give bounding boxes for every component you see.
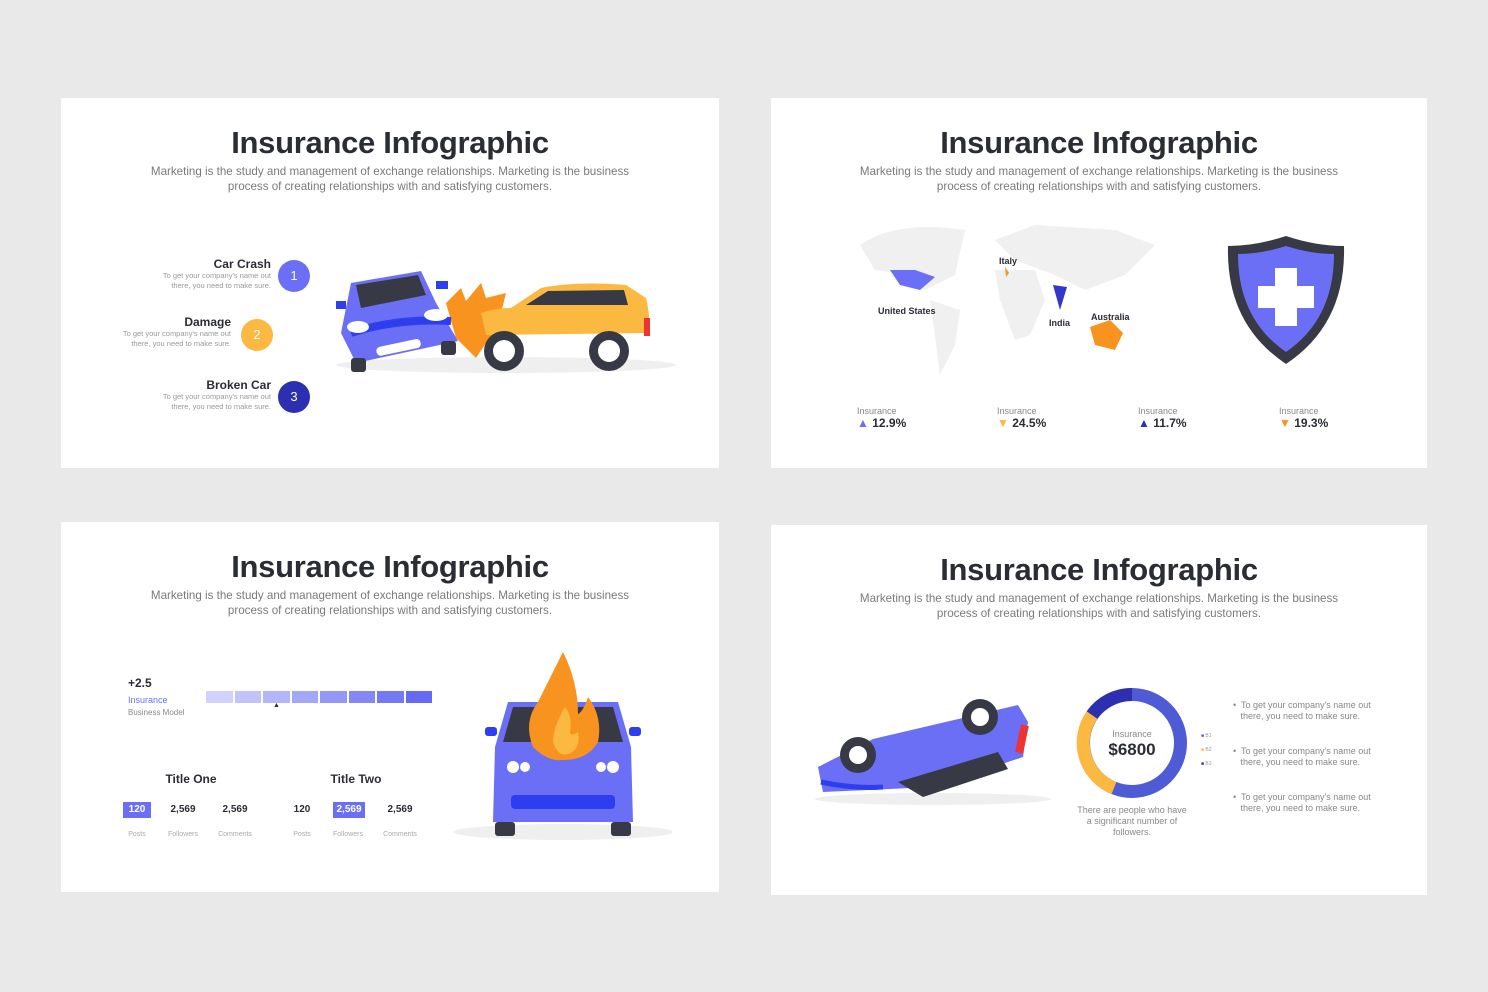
legend: ■ B2 bbox=[1201, 747, 1212, 753]
subtitle: process of creating relationships with and satisfying customers. bbox=[228, 180, 552, 193]
panel: world map: ▼ 24.5% bbox=[997, 416, 1046, 430]
subtitle: Marketing is the study and management of exchange relationships. Marketing is the business bbox=[860, 165, 1338, 178]
subtitle bbox=[860, 165, 1338, 193]
subtitle: process of creating relationships with and satisfying customers. bbox=[228, 604, 552, 617]
gradient bar: ▲ bbox=[273, 702, 280, 709]
item: car crash: To get your company's name out bbox=[163, 271, 271, 280]
legend bbox=[1201, 733, 1212, 767]
bullet list: • To get your company's name out bbox=[1233, 700, 1371, 710]
table: title one: Posts bbox=[128, 831, 146, 838]
table: title two: Followers bbox=[333, 831, 363, 838]
panel: world map: ▼ 19.3% bbox=[1279, 416, 1328, 430]
panel: world map: Australia bbox=[1091, 312, 1130, 322]
title: Insurance Infographic bbox=[940, 552, 1258, 587]
table: title one: Comments bbox=[218, 831, 252, 838]
donut caption: There are people who have a significant number of followers. bbox=[1077, 805, 1187, 837]
table: title two: Title Two bbox=[331, 772, 381, 786]
title: Insurance Infographic bbox=[940, 125, 1258, 160]
panel: world map: Insurance bbox=[1138, 406, 1178, 416]
stats: Insurance bbox=[857, 406, 897, 416]
metric: +2.5 bbox=[128, 676, 152, 690]
table: title one: 2,569 bbox=[170, 804, 196, 815]
table: title one bbox=[123, 772, 252, 838]
title: Insurance Infographic bbox=[231, 125, 549, 160]
subtitle bbox=[151, 589, 629, 617]
illustration: car crash bbox=[336, 271, 676, 373]
table: title one: Title One bbox=[165, 772, 217, 786]
icon: circle 1 bbox=[278, 260, 310, 292]
icon: circle 3 bbox=[278, 381, 310, 413]
icon: circle 3: 3 bbox=[290, 389, 298, 404]
item: broken car: there, you need to make sure. bbox=[171, 402, 271, 411]
icon: circle 2 bbox=[241, 319, 273, 351]
table: title two: 2,569 bbox=[387, 804, 413, 815]
item: damage bbox=[123, 315, 231, 348]
table: title one: 120 bbox=[129, 804, 145, 815]
world map bbox=[860, 225, 1154, 374]
table: title two: Comments bbox=[383, 831, 417, 838]
subtitle: process of creating relationships with and satisfying customers. bbox=[937, 180, 1261, 193]
illustration: car on fire bbox=[453, 652, 673, 840]
legend: ■ B3 bbox=[1201, 761, 1212, 767]
subtitle: Marketing is the study and management of exchange relationships. Marketing is the business bbox=[860, 592, 1338, 605]
item: broken car: To get your company's name out bbox=[163, 392, 271, 401]
stats: ▲ 12.9% bbox=[857, 416, 906, 430]
panel: donut bbox=[771, 525, 1427, 895]
donut center label bbox=[1108, 729, 1156, 759]
table: title one: Followers bbox=[168, 831, 198, 838]
item: car crash: there, you need to make sure. bbox=[171, 281, 271, 290]
item: car crash bbox=[163, 257, 271, 290]
subtitle bbox=[860, 592, 1338, 620]
table: title two bbox=[293, 772, 417, 838]
donut center label: Insurance bbox=[1112, 729, 1152, 739]
bullet list bbox=[1233, 700, 1371, 813]
donut chart bbox=[1076, 688, 1187, 798]
panel: world map: ▲ 11.7% bbox=[1138, 416, 1187, 430]
legend: ■ B1 bbox=[1201, 733, 1212, 739]
bullet list: there, you need to make sure. bbox=[1240, 803, 1360, 813]
donut center label: $6800 bbox=[1108, 740, 1156, 759]
panel: car crash bbox=[61, 98, 719, 468]
table: title one: 2,569 bbox=[222, 804, 248, 815]
item: damage: To get your company's name out bbox=[123, 329, 231, 338]
item: damage: Damage bbox=[184, 315, 231, 329]
icon: circle 1: 1 bbox=[290, 268, 298, 283]
subtitle: Marketing is the study and management of exchange relationships. Marketing is the business bbox=[151, 165, 629, 178]
stats bbox=[857, 406, 906, 430]
bullet list: there, you need to make sure. bbox=[1240, 757, 1360, 767]
item: broken car bbox=[163, 378, 271, 411]
title: Insurance Infographic bbox=[231, 549, 549, 584]
panel: world map: Italy bbox=[999, 256, 1017, 266]
bullet list: • To get your company's name out bbox=[1233, 792, 1371, 802]
subtitle: Marketing is the study and management of exchange relationships. Marketing is the business bbox=[151, 589, 629, 602]
illustration: flipped car bbox=[815, 699, 1051, 805]
bullet list: there, you need to make sure. bbox=[1240, 711, 1360, 721]
metric: Business Model bbox=[128, 708, 184, 717]
gradient bar bbox=[206, 691, 432, 709]
panel: world map: Insurance bbox=[1279, 406, 1319, 416]
table: title two: 2,569 bbox=[336, 804, 362, 815]
metric bbox=[128, 676, 184, 717]
icon: circle 2: 2 bbox=[253, 327, 261, 342]
panel: world map: Insurance bbox=[997, 406, 1037, 416]
panel: burning car bbox=[61, 522, 719, 892]
icon: shield bbox=[1228, 236, 1344, 364]
panel: world map: India bbox=[1049, 318, 1070, 328]
item: car crash: Car Crash bbox=[214, 257, 271, 271]
metric: Insurance bbox=[128, 695, 168, 705]
item: damage: there, you need to make sure. bbox=[131, 339, 231, 348]
item: broken car: Broken Car bbox=[206, 378, 271, 392]
subtitle: process of creating relationships with and satisfying customers. bbox=[937, 607, 1261, 620]
map labels: United States bbox=[878, 306, 936, 316]
table: title two: 120 bbox=[294, 804, 310, 815]
panel: world map bbox=[771, 98, 1427, 468]
subtitle bbox=[151, 165, 629, 193]
table: title two: Posts bbox=[293, 831, 311, 838]
bullet list: • To get your company's name out bbox=[1233, 746, 1371, 756]
